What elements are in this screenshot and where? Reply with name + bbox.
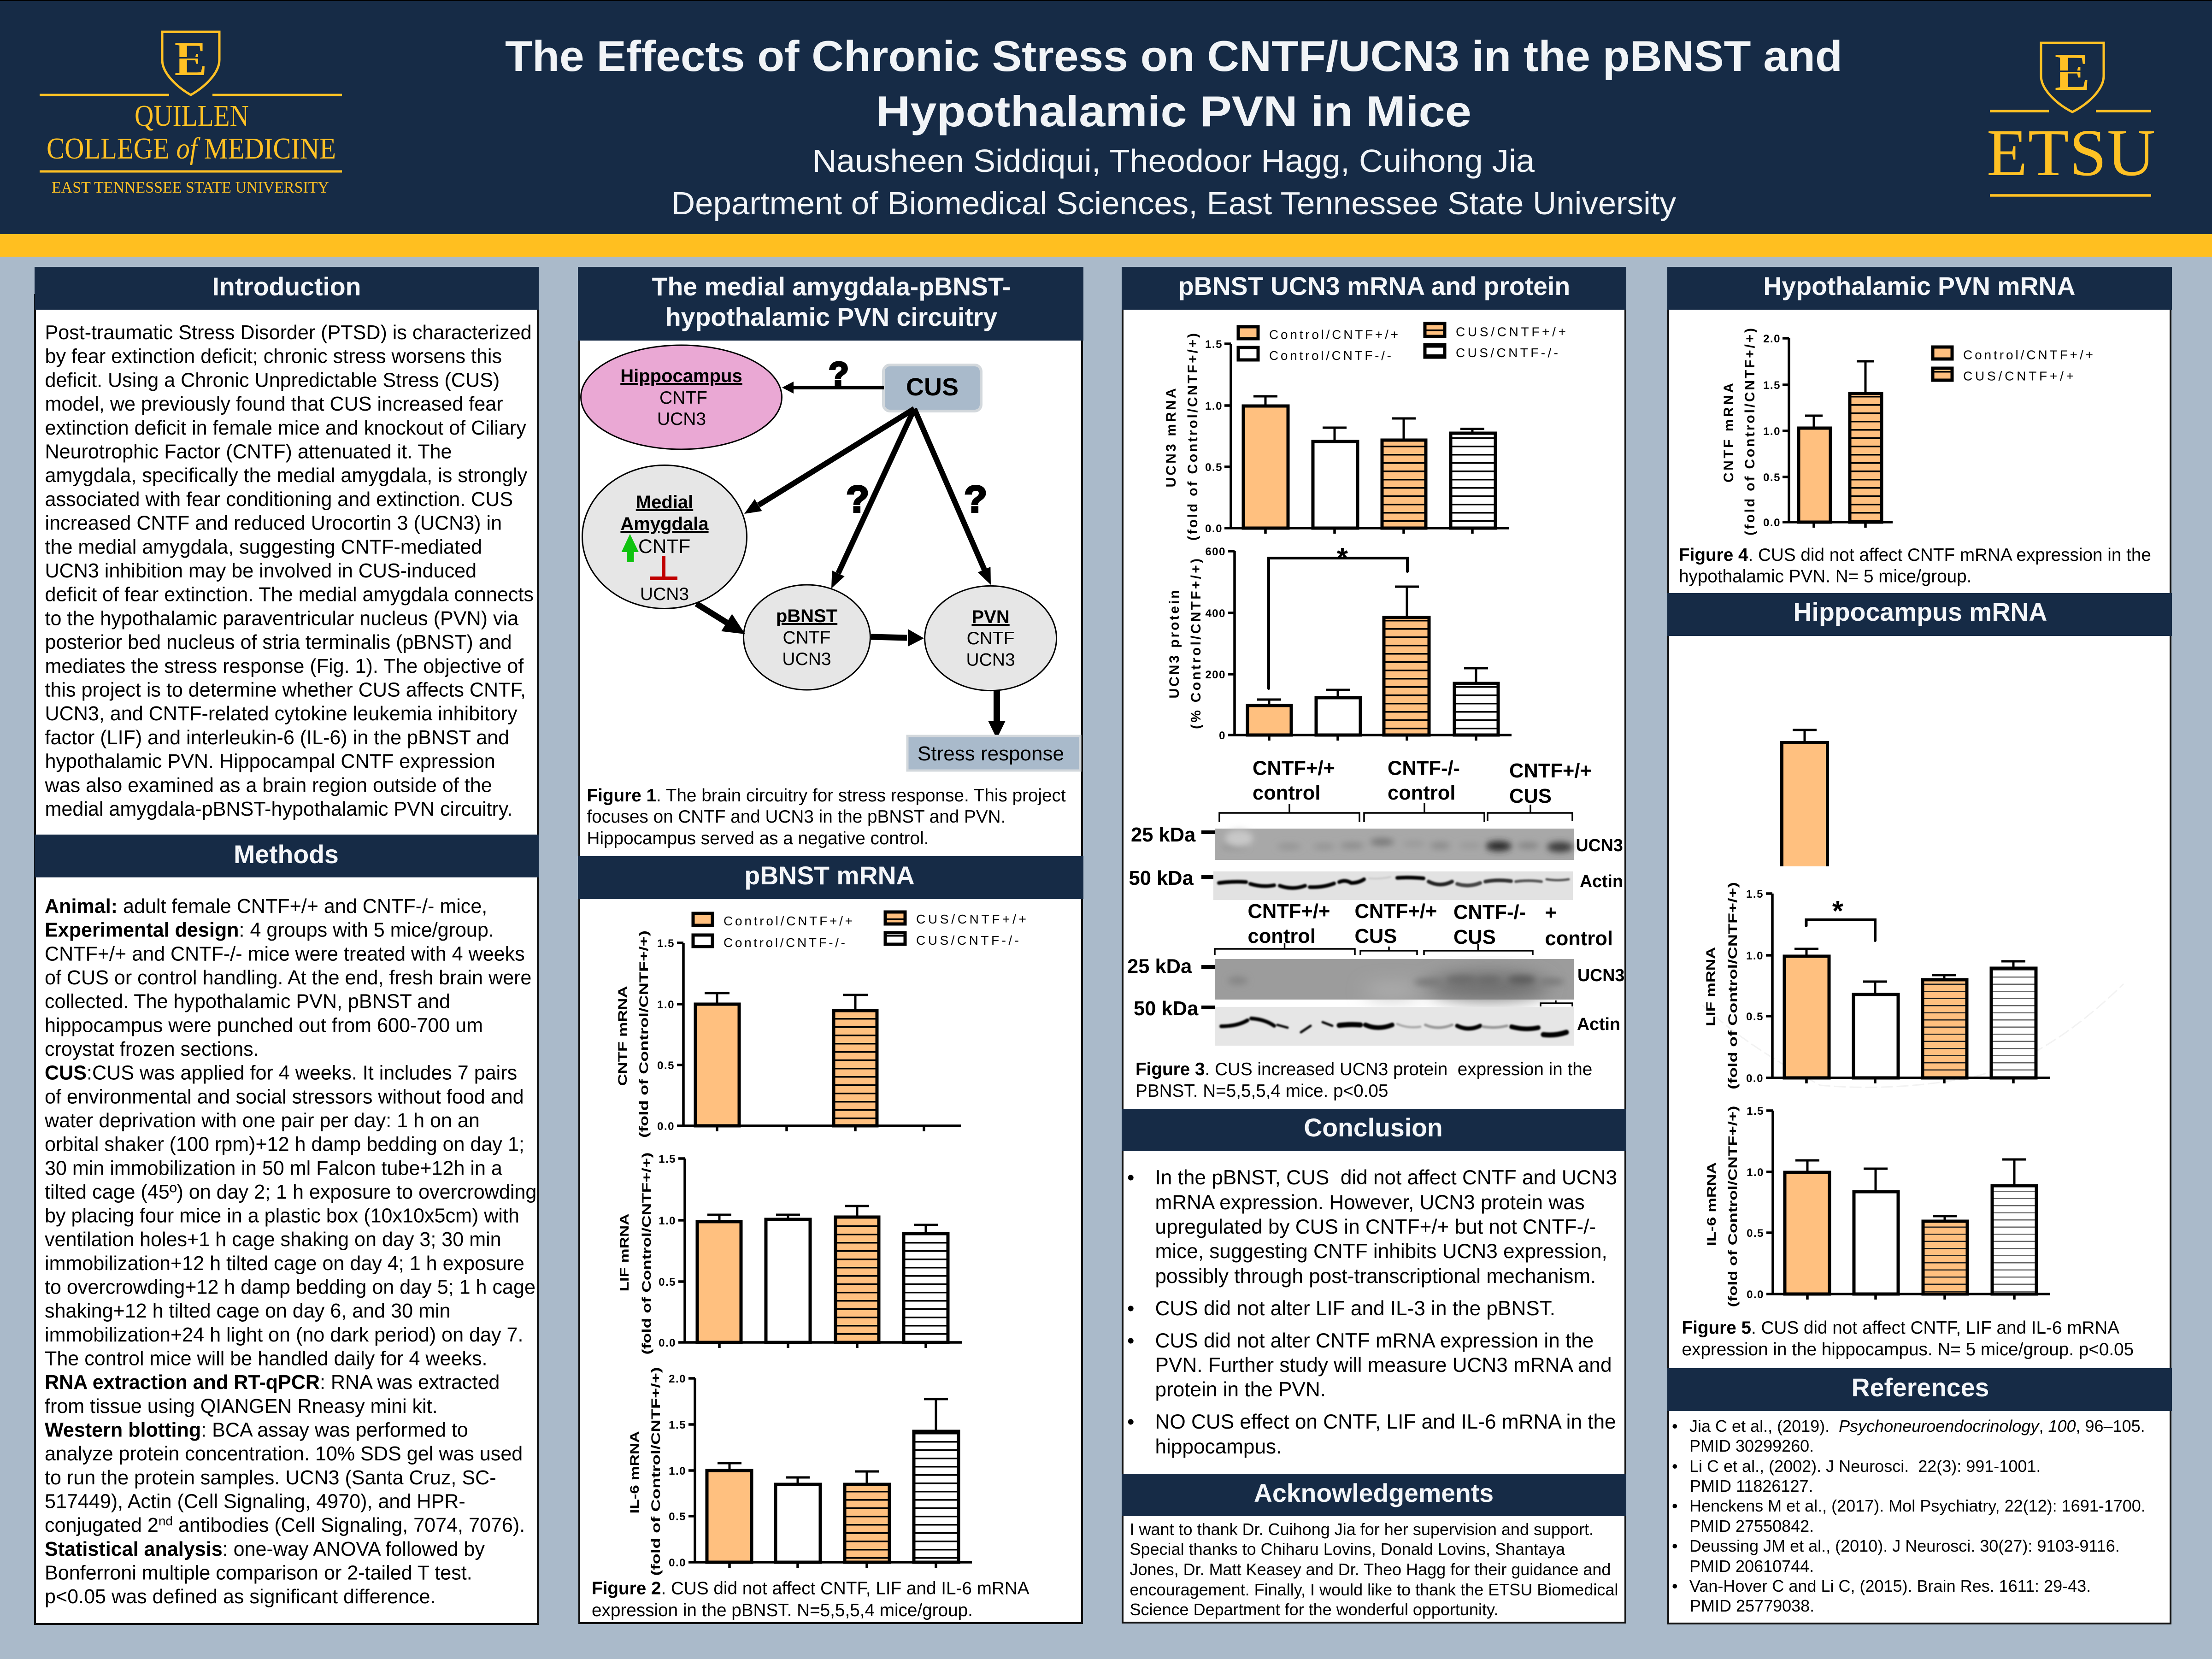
node: medial amygdala: [582, 465, 747, 608]
text block: introduction: hypothalamic PVN. Hippocampal CNTF expression: [45, 751, 495, 773]
significance bracket: [1806, 895, 1875, 941]
text block: methods: croystat frozen sections.: [45, 1038, 259, 1060]
text block: methods: nd: [159, 1514, 173, 1528]
arrow: CUS to PVN: ?: [964, 478, 987, 520]
text block: acknowledgements: Jones, Dr. Matt Keasey and Dr. Theo Hagg for their guidance and: [1130, 1560, 1611, 1579]
bar chart: PVN CNTF mRNA: [1721, 328, 1893, 535]
bar chart: pBNST CNTF mRNA: 1.5: [657, 937, 675, 950]
text block: methods: [44, 895, 536, 1608]
text block: methods: Experimental design: 4 groups with 5 mice/group.: [45, 919, 494, 941]
western blot: lower pair: CUS: [1355, 925, 1397, 947]
node: hippocampus: CNTF: [659, 388, 707, 408]
caption: figure 4: [1679, 545, 2151, 586]
bar chart: UCN3 protein: [1167, 542, 1512, 742]
authors and affiliation: [671, 143, 1676, 221]
bar chart: hippocampus LIF mRNA: LIF mRNA: [1704, 947, 1718, 1026]
authors and affiliation: Nausheen Siddiqui, Theodoor Hagg, Cuihong Jia: [812, 143, 1535, 179]
western blot: upper pair: control: [1388, 782, 1455, 804]
heading: conclusion: Conclusion: [1304, 1113, 1443, 1142]
panel: references: [1667, 1368, 2172, 1624]
caption: figure 2: Figure 2. CUS did not affect CNTF, LIF and IL-6 mRNA: [592, 1579, 1030, 1598]
bar chart: hippocampus LIF mRNA: (fold of Control/CNTF+/+): [1726, 882, 1740, 1089]
text block: introduction: medial amygdala-pBNST-hypothalamic PVN circuitry.: [45, 798, 512, 820]
heading: pBNST UCN3: pBNST UCN3 mRNA and protein: [1178, 272, 1570, 300]
icon: red inhibition bar: [650, 556, 677, 578]
logo: Quillen College of Medicine: [40, 32, 342, 196]
text block: methods: water deprivation with one pair per day: 1 h on an: [44, 1110, 480, 1132]
heading: circuitry: [652, 272, 1011, 331]
text block: references: [1672, 1417, 2146, 1615]
caption: figure 4: Figure 4. CUS did not affect CNTF mRNA expression in the: [1679, 545, 2151, 565]
arrow: CUS to pBNST: [831, 409, 914, 588]
text block: introduction: UCN3 inhibition may be involved in CUS-induced: [45, 560, 477, 582]
bar chart: hippocampus IL-6 mRNA: 0.5: [1747, 1227, 1764, 1240]
caption: figure 1: focuses on CNTF and UCN3 in the pBNST and PVN.: [587, 807, 1006, 827]
panel: hippocampus mRNA: [1667, 593, 2172, 1378]
legend: PVN: Control/CNTF+/+: [1963, 347, 2093, 362]
western blot: lower pair: 25 kDa: [1127, 956, 1192, 978]
text block: conclusion bullets: upregulated by CUS in CNTF+/+ but not CNTF-/-: [1155, 1216, 1596, 1238]
node: hippocampus: Hippocampus: [620, 366, 742, 386]
text block: references: PMID 25779038.: [1690, 1596, 1814, 1615]
text block: introduction: to the hypothalamic paraventricular nucleus (PVN) via: [45, 607, 518, 629]
bar chart: pBNST LIF mRNA: 0.0: [659, 1337, 676, 1349]
bar chart: hippocampus LIF mRNA: 1.5: [1746, 888, 1764, 900]
bar chart: hippocampus LIF mRNA: 0.5: [1746, 1011, 1764, 1023]
text block: methods: immobilization+12 h tilted cage on day 4; 1 h exposure: [45, 1253, 524, 1275]
logo: Quillen College of Medicine: QUILLEN: [135, 99, 249, 133]
node: PVN: PVN: [971, 607, 1010, 627]
bar chart: pBNST IL-6 mRNA: 0.0: [669, 1557, 686, 1569]
caption: figure 1: Hippocampus served as a negative control.: [587, 829, 929, 848]
text block: methods: to run the protein samples. UCN3 (Santa Cruz, SC-: [45, 1467, 496, 1489]
text block: references: •: [1672, 1496, 1678, 1515]
text block: methods: hippocampus were punched out from 600-700 um: [45, 1014, 483, 1036]
text block: references: •: [1672, 1577, 1678, 1595]
significance bracket: [1269, 542, 1407, 688]
bar chart: pBNST CNTF mRNA: 0.0: [657, 1120, 675, 1133]
bar chart: pBNST CNTF mRNA: CNTF mRNA: [616, 986, 629, 1086]
caption: figure 5: expression in the hippocampus. N= 5 mice/group. p<0.05: [1682, 1340, 2134, 1359]
text block: conclusion bullets: •: [1127, 1330, 1134, 1352]
text block: acknowledgements: Science Department for the wonderful opportunity.: [1130, 1600, 1498, 1619]
text block: methods: Animal: adult female CNTF+/+ and CNTF-/- mice,: [45, 895, 487, 918]
text block: references: Jia C et al., (2019). Psychoneuroendocrinology, 100, 96–105.: [1689, 1417, 2145, 1435]
text block: methods: antibodies (Cell Signaling, 7074, 7076).: [173, 1514, 525, 1536]
legend: pBNST: CUS/CNTF-/-: [916, 933, 1019, 947]
western blot: upper pair: CUS: [1509, 785, 1552, 807]
bar chart: PVN CNTF mRNA: 0.0: [1763, 517, 1781, 529]
bar chart: PVN CNTF mRNA: 1.5: [1763, 379, 1781, 392]
panel: pBNST UCN3 mRNA and protein: [1122, 267, 1626, 1120]
western blot: lower pair: control: [1248, 925, 1316, 947]
bar chart: UCN3 protein: UCN3 protein: [1167, 590, 1182, 699]
text block: methods: 30 min immobilization in 50 ml Falcon tube+12h in a: [45, 1157, 502, 1179]
western blot: lower pair: CNTF+/+: [1355, 900, 1437, 923]
western blot: upper pair: CNTF-/-: [1388, 758, 1460, 780]
bar chart: PVN CNTF mRNA: 1.0: [1763, 425, 1781, 438]
heading: acknowledgements: Acknowledgements: [1254, 1479, 1494, 1507]
node: pBNST: pBNST: [776, 606, 837, 626]
heading: circuitry: The medial amygdala-pBNST-: [652, 272, 1011, 301]
text block: references: PMID 27550842.: [1689, 1517, 1814, 1535]
text block: methods: immobilization+24 h light on (no dark period) on day 7.: [45, 1324, 523, 1346]
logo: Quillen College of Medicine: EAST TENNESSEE STATE UNIVERSITY: [52, 178, 329, 196]
text block: introduction: Post-traumatic Stress Disorder (PTSD) is characterized: [45, 322, 532, 344]
heading: hypothalamic PVN: Hypothalamic PVN mRNA: [1763, 272, 2076, 300]
box: stress response: Stress response: [918, 742, 1064, 765]
bar chart: PVN CNTF mRNA: CNTF mRNA: [1721, 383, 1736, 482]
arrow: pBNST to PVN: [871, 629, 924, 647]
bar chart: UCN3 protein: 0: [1219, 729, 1226, 742]
text block: conclusion bullets: •: [1127, 1166, 1134, 1189]
bar chart: UCN3 mRNA: [1164, 333, 1509, 541]
bar chart: PVN CNTF mRNA: (fold of Control/CNTF+/+): [1742, 328, 1758, 535]
western blot: lower pair: 50 kDa: [1134, 998, 1199, 1020]
text block: methods: CUS:CUS was applied for 4 weeks. It includes 7 pairs: [45, 1062, 517, 1084]
bar chart: pBNST LIF mRNA: 1.5: [659, 1153, 676, 1165]
text block: methods: RNA extraction and RT-qPCR: RNA was extracted: [45, 1371, 500, 1394]
bar chart: UCN3 protein: 600: [1205, 546, 1226, 558]
node: medial amygdala: CNTF: [638, 536, 690, 558]
text block: introduction: amygdala, specifically the medial amygdala, is strongly: [45, 465, 528, 487]
bar chart: hippocampus IL-6 mRNA: 1.0: [1747, 1166, 1764, 1179]
arrow: amygdala to pBNST: [696, 604, 745, 634]
logo: ETSU: E: [2055, 43, 2090, 101]
text block: introduction: was also examined as a brain region outside of the: [44, 774, 492, 796]
text block: methods: Statistical analysis: one-way ANOVA followed by: [45, 1538, 485, 1560]
node: CUS: CUS: [906, 373, 959, 401]
bar chart: pBNST IL-6 mRNA: IL-6 mRNA: [628, 1431, 641, 1513]
text block: introduction: the medial amygdala, suggesting CNTF-mediated: [45, 536, 482, 558]
text block: methods: conjugated 2: [45, 1514, 159, 1536]
text block: acknowledgements: [1130, 1520, 1618, 1619]
text block: methods: 517449), Actin (Cell Signaling, 4970), and HPR-: [45, 1490, 465, 1512]
legend: PVN: CUS/CNTF+/+: [1963, 369, 2074, 383]
western blot: lower pair: [1127, 900, 1624, 1046]
caption: figure 2: [592, 1579, 1030, 1620]
heading: references: References: [1852, 1373, 1989, 1402]
bar chart: PVN CNTF mRNA: 2.0: [1763, 333, 1781, 345]
significance bracket: *: [1337, 542, 1348, 574]
bar chart: UCN3 mRNA: 1.5: [1205, 338, 1223, 351]
bar chart: hippocampus IL-6 mRNA: 1.5: [1747, 1105, 1764, 1118]
text block: references: •: [1672, 1417, 1678, 1435]
caption: figure 5: [1682, 1318, 2134, 1359]
text block: introduction: deficit. Using a Chronic Unpredictable Stress (CUS): [45, 369, 500, 391]
bar chart: UCN3 protein: (% Control/CNTF+/+): [1188, 559, 1204, 729]
legend: pBNST: [693, 912, 1026, 950]
western blot: upper pair: 50 kDa: [1129, 867, 1194, 889]
text block: methods: collected. The hypothalamic PVN, pBNST and: [45, 991, 450, 1013]
caption: figure 3: Figure 3. CUS increased UCN3 protein expression in the: [1135, 1059, 1592, 1079]
node: hippocampus: [581, 345, 782, 449]
text block: methods: CNTF+/+ and CNTF-/- mice were treated with 4 weeks: [45, 943, 525, 965]
text block: conclusion bullets: mRNA expression. However, UCN3 protein was: [1155, 1191, 1585, 1214]
text block: acknowledgements: I want to thank Dr. Cuihong Jia for her supervision and support.: [1130, 1520, 1594, 1539]
bar chart: pBNST LIF mRNA: [618, 1152, 962, 1355]
western blot: lower pair: +: [1545, 902, 1557, 924]
bar chart: UCN3 mRNA: (fold of Control/CNTF+/+): [1185, 333, 1200, 541]
text block: references: •: [1672, 1536, 1678, 1555]
text block: references: •: [1672, 1457, 1678, 1476]
bar chart: pBNST LIF mRNA: 1.0: [659, 1215, 676, 1227]
bar chart: pBNST IL-6 mRNA: [628, 1367, 972, 1576]
text block: references: PMID 20610744.: [1689, 1557, 1814, 1576]
legend: pBNST: Control/CNTF+/+: [724, 914, 853, 928]
bar chart: pBNST CNTF mRNA: (fold of Control/CNTF+/+): [637, 930, 651, 1138]
arrow: CUS to pBNST: ?: [846, 478, 869, 520]
bar chart: UCN3 protein: 400: [1205, 607, 1226, 620]
node: PVN: CNTF: [967, 629, 1015, 648]
text block: conclusion bullets: •: [1127, 1411, 1134, 1433]
text block: conclusion bullets: NO CUS effect on CNTF, LIF and IL-6 mRNA in the: [1155, 1411, 1616, 1433]
bar chart: pBNST IL-6 mRNA: 0.5: [669, 1511, 686, 1523]
icon: green up arrow: [621, 534, 639, 562]
text block: references: Deussing JM et al., (2010). J Neurosci. 30(27): 9103-9116.: [1689, 1536, 2120, 1555]
bar chart: pBNST CNTF mRNA: 0.5: [657, 1059, 675, 1072]
bar chart: pBNST IL-6 mRNA: 1.5: [669, 1419, 686, 1431]
text block: conclusion bullets: mice, suggesting CNTF inhibits UCN3 expression,: [1155, 1240, 1607, 1263]
text block: conclusion bullets: protein in the PVN.: [1155, 1378, 1326, 1401]
bar chart: PVN CNTF mRNA: 0.5: [1763, 471, 1781, 484]
legend: UCN3: Control/CNTF-/-: [1269, 348, 1391, 363]
panel: pBNST mRNA: [578, 856, 1083, 1623]
text block: conclusion bullets: CUS did not alter CNTF mRNA expression in the: [1155, 1330, 1594, 1352]
node: PVN: [925, 586, 1057, 691]
arrow: CUS to medial amygdala: [744, 409, 914, 514]
bar chart: hippocampus IL-6 mRNA: [1705, 1105, 2050, 1307]
text block: methods: of CUS or control handling. At the end, fresh brain were: [45, 967, 531, 989]
box: stress response: [907, 736, 1080, 771]
western blot: lower pair: CNTF-/-: [1453, 901, 1526, 924]
text block: methods: from tissue using QIANGEN Rneasy mini kit.: [45, 1395, 438, 1418]
node: medial amygdala: UCN3: [640, 584, 689, 604]
text block: introduction: Neurotrophic Factor (CNTF) attenuated it. The: [45, 441, 452, 463]
legend: UCN3: CUS/CNTF-/-: [1456, 346, 1558, 360]
text block: methods: The control mice will be handled daily for 4 weeks.: [45, 1347, 488, 1370]
panel: introduction: [35, 267, 539, 848]
legend: PVN: [1933, 347, 2093, 383]
text block: introduction: this project is to determine whether CUS affects CNTF,: [45, 679, 526, 701]
western blot: upper pair: control: [1253, 782, 1320, 804]
bar chart: hippocampus CNTF partial bar: [1780, 730, 1829, 866]
western blot: lower pair: control: [1545, 928, 1613, 950]
western blot: upper pair: CNTF+/+: [1509, 760, 1592, 782]
bar chart: UCN3 mRNA: 0.0: [1205, 523, 1223, 535]
node: medial amygdala: Medial: [636, 492, 693, 512]
text block: references: Henckens M et al., (2017). Mol Psychiatry, 22(12): 1691-1700.: [1689, 1496, 2146, 1515]
bar chart: pBNST IL-6 mRNA: (fold of Control/CNTF+/+): [649, 1367, 663, 1576]
caption: figure 1: Figure 1. The brain circuitry for stress response. This project: [587, 786, 1066, 806]
text block: methods: shaking+12 h tilted cage on day 6, and 30 min: [45, 1300, 450, 1322]
text block: references: Li C et al., (2002). J Neurosci. 22(3): 991-1001.: [1689, 1457, 2041, 1476]
bar chart: pBNST CNTF mRNA: 1.0: [657, 999, 675, 1011]
text block: introduction: increased CNTF and reduced Urocortin 3 (UCN3) in: [45, 512, 502, 535]
bar chart: pBNST LIF mRNA: (fold of Control/CNTF+/+): [640, 1152, 653, 1355]
panel: acknowledgements: [1122, 1474, 1626, 1623]
logo: ETSU: ETSU: [1987, 116, 2155, 190]
caption: figure 1: [587, 786, 1066, 848]
heading: pBNST mRNA: pBNST mRNA: [744, 861, 915, 890]
text block: introduction: factor (LIF) and interleukin-6 (IL-6) in the pBNST and: [45, 727, 509, 749]
arrow: CUS to PVN: [914, 409, 991, 585]
text block: methods: Western blotting: BCA assay was performed to: [45, 1419, 468, 1441]
caption: figure 5: Figure 5. CUS did not affect CNTF, LIF and IL-6 mRNA: [1682, 1318, 2119, 1338]
arrow: CUS to hippocampus: ?: [829, 356, 849, 393]
text block: references: PMID 11826127.: [1690, 1477, 1813, 1495]
legend: pBNST: Control/CNTF-/-: [724, 935, 845, 950]
arrow: PVN to stress response: [988, 690, 1006, 739]
caption: figure 3: PBNST. N=5,5,5,4 mice. p<0.05: [1135, 1081, 1388, 1101]
node: pBNST: [744, 585, 870, 690]
text block: conclusion bullets: hippocampus.: [1155, 1435, 1282, 1458]
heading: hippocampus: Hippocampus mRNA: [1794, 598, 2047, 626]
title: The Effects of Chronic Stress on CNTF/UCN3 in the pBNST and: [505, 32, 1842, 80]
western blot: upper pair: UCN3: [1576, 835, 1623, 855]
bar chart: pBNST LIF mRNA: LIF mRNA: [618, 1214, 631, 1291]
text block: methods: p<0.05 was defined as significant difference.: [45, 1586, 435, 1608]
western blot: lower pair: UCN3: [1577, 965, 1624, 985]
text block: acknowledgements: Special thanks to Chiharu Lovins, Donald Lovins, Shantaya: [1130, 1540, 1565, 1559]
western blot: upper pair: 25 kDa: [1131, 824, 1196, 846]
western blot: upper pair: Actin: [1580, 871, 1623, 891]
legend: UCN3: CUS/CNTF+/+: [1456, 324, 1566, 339]
text block: introduction: associated with fear conditioning and extinction. CUS: [45, 488, 513, 511]
text block: references: PMID 30299260.: [1689, 1436, 1814, 1455]
caption: figure 2: expression in the pBNST. N=5,5,5,4 mice/group.: [592, 1600, 973, 1620]
text block: introduction: deficit of fear extinction. The medial amygdala connects: [45, 584, 534, 606]
bar chart: pBNST LIF mRNA: 0.5: [659, 1276, 676, 1288]
bar chart: pBNST IL-6 mRNA: 2.0: [669, 1373, 686, 1385]
text block: methods: orbital shaker (100 rpm)+12 h damp bedding on day 1;: [45, 1134, 524, 1156]
text block: methods: by placing four mice in a plastic box (10x10x5cm) with: [45, 1205, 519, 1227]
text block: conclusion bullets: In the pBNST, CUS did not affect CNTF and UCN3: [1155, 1166, 1617, 1189]
bar chart: hippocampus IL-6 mRNA: 0.0: [1747, 1288, 1764, 1301]
node: medial amygdala: Amygdala: [620, 514, 709, 534]
title: Hypothalamic PVN in Mice: [876, 87, 1471, 135]
western blot: upper pair: CNTF+/+: [1253, 758, 1335, 780]
title: [505, 32, 1842, 135]
heading: methods: Methods: [234, 840, 339, 869]
panel: hypothalamic PVN mRNA: [1667, 267, 2172, 599]
heading: introduction: Introduction: [212, 272, 361, 301]
significance bracket: *: [1832, 895, 1844, 927]
text block: methods: ventilation holes+1 h cage shaking on day 3; 30 min: [45, 1229, 501, 1251]
legend: UCN3: [1238, 324, 1566, 363]
western blot: lower pair: Actin: [1577, 1014, 1620, 1034]
text block: conclusion bullets: CUS did not alter LIF and IL-3 in the pBNST.: [1155, 1297, 1555, 1320]
authors and affiliation: Department of Biomedical Sciences, East Tennessee State University: [671, 185, 1676, 221]
node: CUS: [883, 365, 981, 411]
panel: circuitry: [578, 267, 1083, 862]
western blot: lower pair: CUS: [1453, 926, 1496, 948]
text block: introduction: UCN3, and CNTF-related cytokine leukemia inhibitory: [45, 703, 518, 725]
node: pBNST: CNTF: [783, 628, 830, 648]
text block: references: Van-Hover C and Li C, (2015). Brain Res. 1611: 29-43.: [1689, 1577, 2091, 1595]
text block: introduction: model, we previously found that CUS increased fear: [45, 393, 503, 415]
faint artefact curve: [1702, 984, 2124, 1088]
bar chart: hippocampus LIF mRNA: 0.0: [1746, 1072, 1764, 1085]
bar chart: hippocampus IL-6 mRNA: IL-6 mRNA: [1705, 1162, 1718, 1246]
arrow: CUS to hippocampus: [782, 356, 884, 394]
text block: introduction: by fear extinction deficit; chronic stress worsens this: [45, 346, 502, 368]
bar chart: UCN3 mRNA: 1.0: [1205, 400, 1223, 412]
bar chart: hippocampus LIF mRNA: [1704, 882, 2050, 1089]
text block: introduction: [44, 322, 534, 820]
caption: figure 4: hypothalamic PVN. N= 5 mice/group.: [1679, 567, 1971, 586]
logo: ETSU: [1987, 43, 2155, 195]
logo: Quillen College of Medicine: COLLEGE of MEDICINE: [47, 132, 336, 165]
panel: methods: [35, 835, 539, 1624]
logo: Quillen College of Medicine: E: [175, 32, 207, 86]
text block: conclusion bullets: possibly through post-transcriptional mechanism.: [1155, 1265, 1596, 1288]
text block: introduction: extinction deficit in female mice and knockout of Ciliary: [45, 417, 526, 439]
text block: methods: tilted cage (45º) on day 2; 1 h exposure to overcrowding: [45, 1181, 536, 1203]
text block: acknowledgements: encouragement. Finally, I would like to thank the ETSU Biomedical: [1130, 1580, 1618, 1599]
heading: circuitry: hypothalamic PVN circuitry: [665, 303, 997, 331]
text block: conclusion bullets: •: [1127, 1297, 1134, 1320]
caption: figure 3: [1135, 1059, 1592, 1101]
legend: pBNST: CUS/CNTF+/+: [916, 912, 1026, 926]
bar chart: UCN3 mRNA: UCN3 mRNA: [1164, 388, 1179, 488]
legend: UCN3: Control/CNTF+/+: [1269, 327, 1398, 342]
bar chart: UCN3 mRNA: 0.5: [1205, 461, 1223, 474]
node: hippocampus: UCN3: [657, 409, 706, 429]
text block: conclusion bullets: [1127, 1166, 1617, 1458]
bar chart: pBNST IL-6 mRNA: 1.0: [669, 1465, 686, 1477]
panel: conclusion: [1122, 1109, 1626, 1488]
text block: methods: of environmental and social stressors without food and: [45, 1086, 524, 1108]
text block: conclusion bullets: PVN. Further study will measure UCN3 mRNA and: [1155, 1354, 1612, 1377]
bar chart: UCN3 protein: 200: [1205, 669, 1226, 681]
header banner: [0, 0, 2212, 257]
node: pBNST: UCN3: [782, 649, 831, 669]
text block: methods: analyze protein concentration. 10% SDS gel was used: [45, 1443, 523, 1465]
western blot: upper pair: [1129, 758, 1623, 900]
node: PVN: UCN3: [966, 650, 1015, 670]
western blot: lower pair: CNTF+/+: [1248, 900, 1330, 923]
text block: introduction: mediates the stress response (Fig. 1). The objective of: [45, 655, 524, 677]
bar chart: hippocampus IL-6 mRNA: (fold of Control/CNTF+/+): [1726, 1106, 1740, 1307]
circuit diagram: [581, 345, 1080, 771]
bar chart: pBNST CNTF mRNA: [616, 930, 961, 1138]
text block: methods: Bonferroni multiple comparison or 2-tailed T test.: [45, 1562, 472, 1584]
text block: methods: to overcrowding+12 h damp bedding on day 5; 1 h cage: [45, 1277, 535, 1299]
bar chart: hippocampus LIF mRNA: 1.0: [1746, 950, 1764, 962]
text block: introduction: posterior bed nucleus of stria terminalis (pBNST) and: [45, 631, 512, 653]
